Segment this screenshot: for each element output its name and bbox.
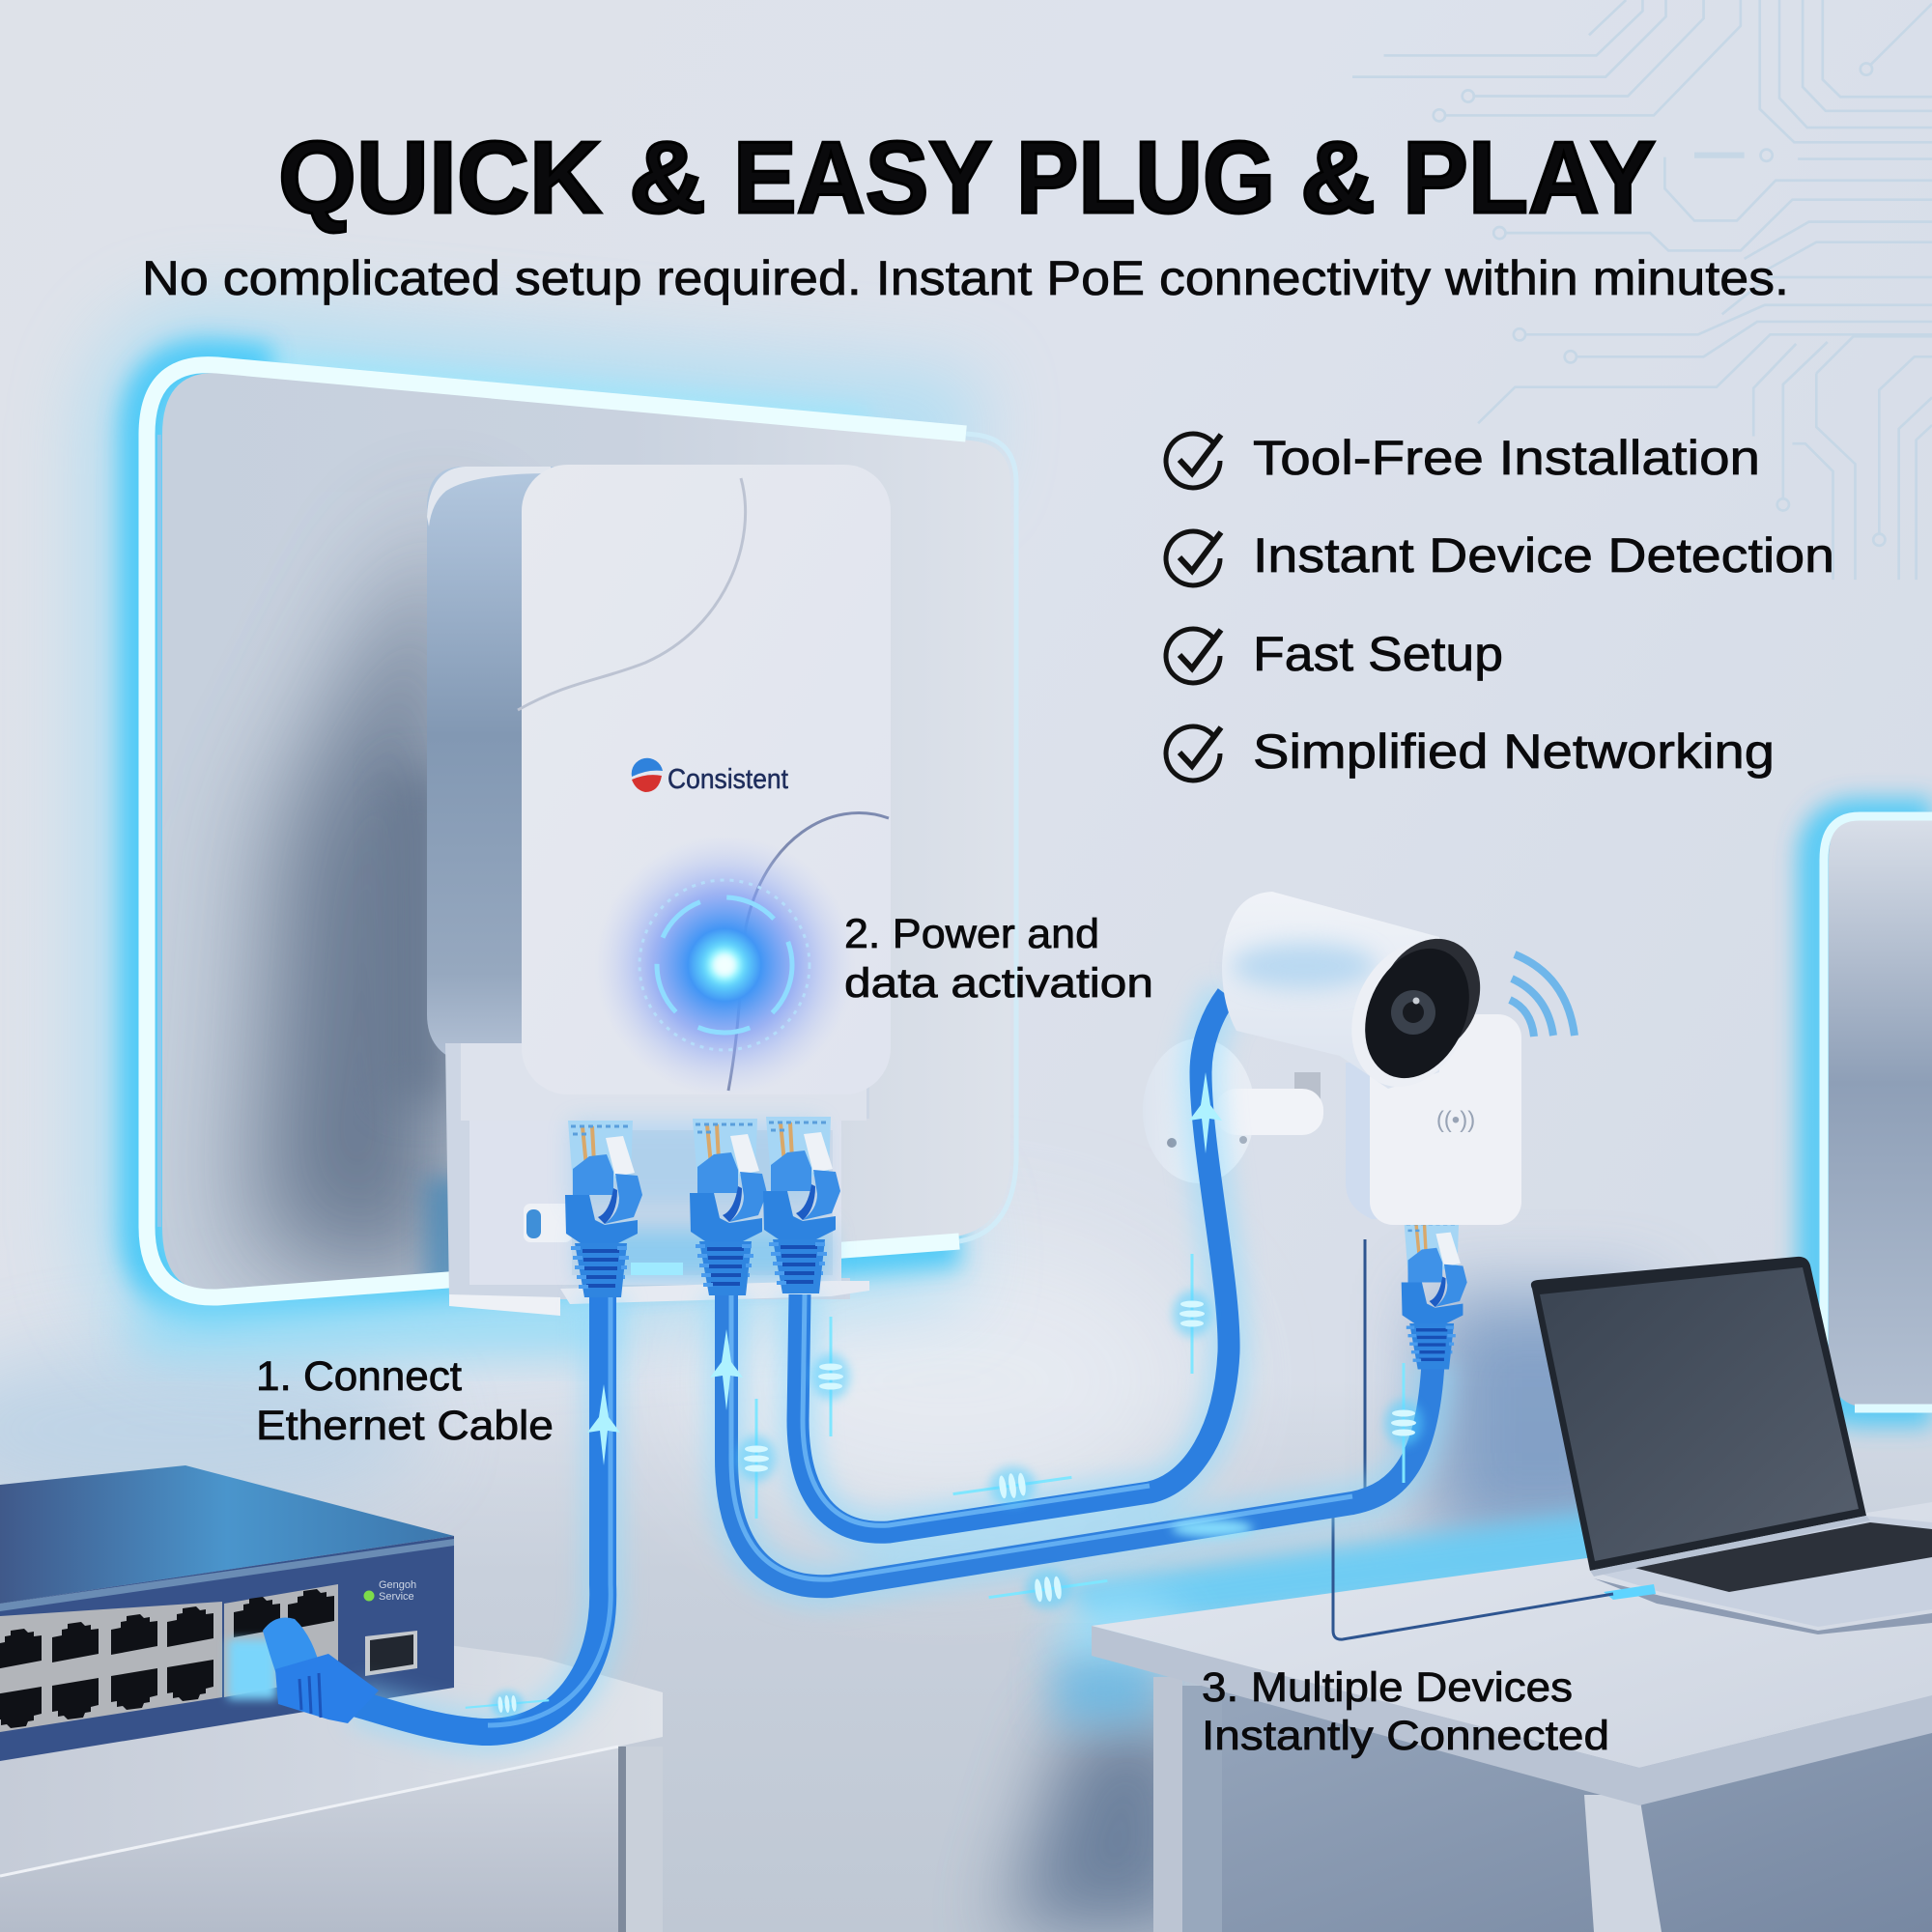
- ethernet cable glow: [355, 995, 1434, 1732]
- step 2 label: data activation: [844, 960, 1153, 1007]
- cable 3: injector to camera: [798, 995, 1229, 1532]
- title: QUICK: [278, 121, 602, 235]
- camera wall mount: [1143, 1038, 1323, 1183]
- step 3 label: Instantly Connected: [1202, 1713, 1609, 1759]
- laptop: [1531, 1257, 1932, 1634]
- status LED and label: [363, 1579, 416, 1603]
- housing top cap: [427, 467, 551, 526]
- back housing: [427, 467, 580, 1063]
- PoE injector device: [427, 465, 891, 1316]
- benefit: fast setup: [1166, 627, 1503, 683]
- logo: Consistent: [668, 764, 788, 795]
- front cover: [522, 465, 891, 1094]
- circuit pattern: [1352, 0, 1932, 580]
- step 1 label: Ethernet Cable: [256, 1403, 554, 1449]
- panel shadow: [251, 512, 473, 1294]
- status LED and label: Service: [379, 1591, 414, 1603]
- left and bottom light strip: [147, 365, 966, 1297]
- data flow sparks: [465, 1072, 1423, 1721]
- benefit: detection: Instant Device Detection: [1253, 528, 1834, 582]
- camera: [1222, 892, 1498, 1106]
- right wall panel: [1816, 816, 1932, 1408]
- cover seams: [518, 478, 889, 1091]
- title: &: [1300, 121, 1376, 235]
- title: &: [629, 121, 706, 235]
- cable 2: injector to devices: [726, 1294, 1434, 1586]
- port panel 1: [0, 1602, 222, 1732]
- PoE receiver box: [1346, 1014, 1521, 1225]
- port panel 2: [224, 1584, 338, 1699]
- title: [278, 121, 1656, 235]
- step 2 label: 2. Power and: [844, 911, 1099, 957]
- camera-end connector: [1402, 1219, 1467, 1370]
- LED glow: [594, 835, 855, 1095]
- step 1 label: 1. Connect: [256, 1353, 462, 1400]
- title: PLUG: [1016, 121, 1275, 235]
- SFP port: [365, 1631, 417, 1676]
- wall mount bracket: [445, 1043, 869, 1316]
- subtitle: No complicated setup required. Instant PoE connectivity within minutes.: [142, 251, 1789, 305]
- status LED and label: Gengoh: [379, 1579, 416, 1591]
- title: PLAY: [1403, 121, 1656, 235]
- benefits list: [1166, 431, 1834, 781]
- step 1 label: [256, 1353, 554, 1449]
- network switch: [0, 1465, 454, 1761]
- glowing wall panel: [135, 365, 1016, 1352]
- step 3 label: 3. Multiple Devices: [1202, 1664, 1573, 1711]
- PoE receiver box: ((•)): [1436, 1107, 1475, 1133]
- right desk: [1092, 1502, 1932, 1932]
- benefit: simplified: Simplified Networking: [1253, 724, 1775, 779]
- left cabinet: [0, 1584, 663, 1932]
- logo: [632, 758, 788, 795]
- injector connectors: [565, 1117, 840, 1297]
- wifi waves: [1510, 954, 1575, 1037]
- mounting slot: [524, 1204, 572, 1242]
- cable 1: switch to injector: [355, 1294, 611, 1732]
- step 2 label: [844, 911, 1153, 1007]
- title: EASY: [733, 121, 992, 235]
- benefit: tool-free: Tool-Free Installation: [1253, 431, 1760, 485]
- benefit: fast setup: Fast Setup: [1253, 627, 1503, 681]
- step 3 label: [1202, 1664, 1609, 1759]
- switch plug: [263, 1617, 379, 1723]
- thin data line to laptop: [1333, 1239, 1613, 1639]
